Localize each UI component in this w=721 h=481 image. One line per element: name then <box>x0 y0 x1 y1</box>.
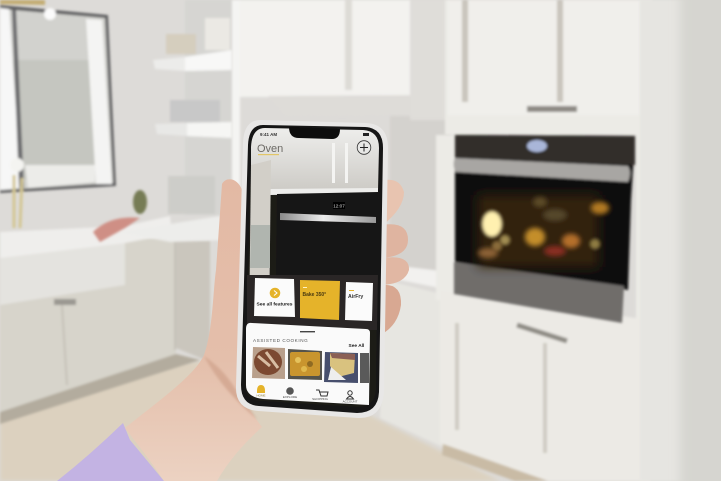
cabinet handles on screen <box>332 143 335 183</box>
notch <box>289 127 340 139</box>
link: see all: See All <box>348 343 364 349</box>
camera oven <box>276 192 378 275</box>
card: see all features: See all features <box>257 302 293 308</box>
phone <box>236 120 388 418</box>
arm and palm <box>125 179 262 481</box>
sleeve <box>57 423 164 481</box>
nav: home: HOME <box>256 394 266 398</box>
plus button <box>357 141 371 154</box>
right column <box>640 0 721 481</box>
oven handle on screen <box>280 213 376 223</box>
heading: assisted cooking: ASSISTED COOKING <box>253 338 308 343</box>
bottom sheet <box>246 323 370 405</box>
oven lower panel <box>454 262 624 323</box>
wrist shadow <box>204 356 258 420</box>
nav: explore: EXPLORE <box>283 395 297 399</box>
floor <box>0 360 500 481</box>
status icons <box>363 133 369 136</box>
oven glow <box>478 195 609 267</box>
oven display <box>527 140 547 152</box>
side wall strip <box>249 160 271 330</box>
phone bezel <box>241 125 383 413</box>
recipe photos <box>252 347 369 383</box>
sink and base cabinets <box>0 216 210 424</box>
icon: chevron circle <box>270 288 280 298</box>
card: airfry: AirFry <box>348 294 363 300</box>
card: bake <box>300 280 340 320</box>
lower cabinets <box>380 130 650 481</box>
oven <box>454 135 635 323</box>
right upper cabinets <box>445 0 652 135</box>
status bar and wall <box>251 128 379 190</box>
centre upper cabinets and hood <box>232 0 450 290</box>
hand <box>57 179 409 481</box>
phone case <box>236 120 388 418</box>
status time: 9:41 AM <box>260 132 277 137</box>
shelves <box>93 0 233 242</box>
phone: 12:07 <box>333 204 345 208</box>
card: bake: Bake 350° <box>302 292 326 298</box>
window <box>0 0 116 228</box>
card: see all features <box>254 278 295 317</box>
card: airfry <box>345 282 373 321</box>
title: Oven: Oven <box>257 143 283 155</box>
nav: shopping: SHOPPING <box>312 397 329 401</box>
screen <box>245 128 379 407</box>
nav: account: ACCOUNT <box>343 400 358 404</box>
fingers <box>382 180 409 334</box>
oven handle <box>454 158 630 182</box>
